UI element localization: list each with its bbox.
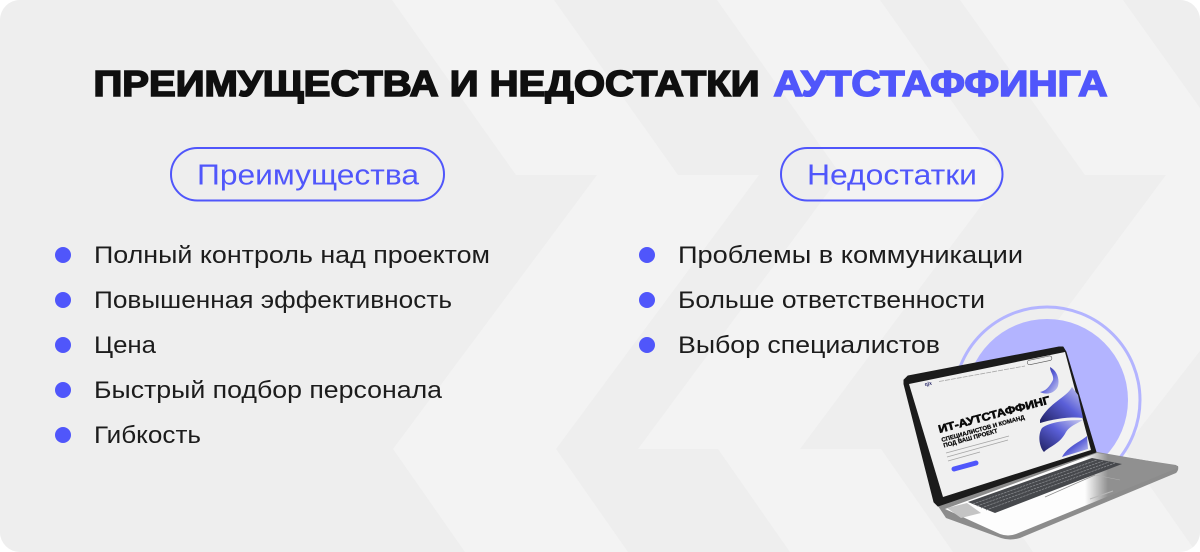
laptop base <box>938 452 1178 540</box>
list item: full control: Полный контроль над проектом <box>94 242 490 269</box>
heading: disadvantages pill <box>781 148 1002 200</box>
list item: choice of specialists: Выбор специалистов <box>678 332 940 359</box>
screen button <box>954 463 976 469</box>
screen heading: ИТ-АУТСТАФФИНГ <box>937 394 1052 436</box>
list item: efficiency: Повышенная эффективность <box>94 287 452 314</box>
list item: communication: Проблемы в коммуникации <box>678 242 1023 269</box>
icon: laptop <box>904 347 1178 540</box>
screen navigation <box>939 356 1052 382</box>
list item: responsibility: Больше ответственности <box>678 287 985 314</box>
screen paragraph lines <box>946 436 1009 461</box>
title: ПРЕИМУЩЕСТВА И НЕДОСТАТКИ <box>94 63 760 104</box>
screen heading: ПОД ВАШ ПРОЕКТ <box>943 429 999 449</box>
panel: disadvantages <box>639 148 1023 359</box>
icon: purple circle behind laptop <box>954 307 1140 493</box>
list item: flexibility: Гибкость <box>94 422 201 449</box>
screen ribbon graphic <box>1039 367 1088 457</box>
list item: flexibility <box>55 422 201 449</box>
screen logo: q|x <box>924 381 933 388</box>
title <box>94 63 1108 104</box>
laptop screen <box>904 347 1096 506</box>
panel: advantages <box>55 148 490 449</box>
screen heading: СПЕЦИАЛИСТОВ И КОМАНД <box>941 415 1026 444</box>
title: АУТСТАФФИНГА <box>774 63 1108 104</box>
heading: advantages pill: Преимущества <box>197 160 420 192</box>
screen heading <box>937 394 1052 449</box>
list item: price <box>55 332 157 359</box>
list item: price: Цена <box>94 332 157 359</box>
list item: fast hiring: Быстрый подбор персонала <box>94 377 443 404</box>
heading: disadvantages pill: Недостатки <box>807 160 977 192</box>
heading: advantages pill <box>171 148 444 200</box>
